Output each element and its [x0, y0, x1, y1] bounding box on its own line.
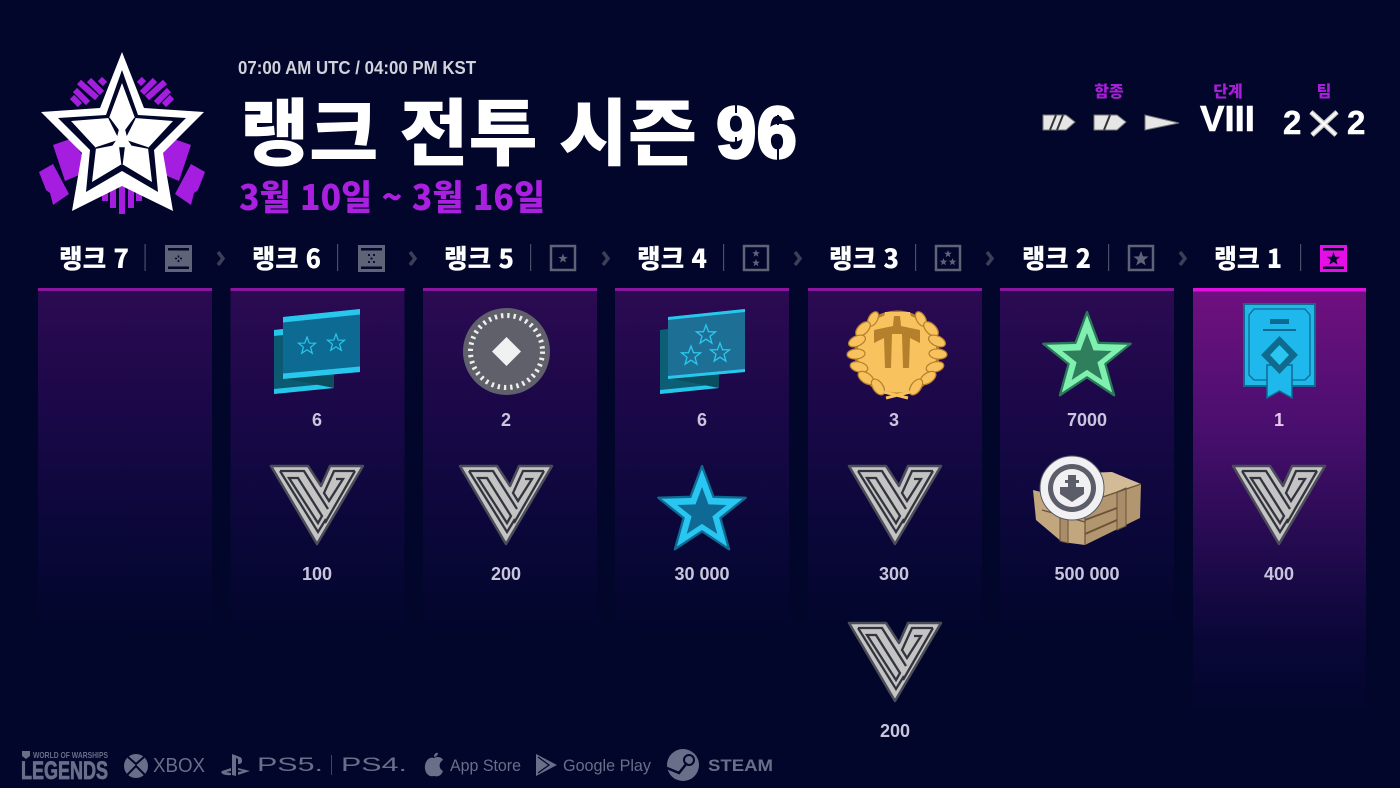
value: 200: 200 [880, 721, 910, 741]
icon: rank 3 badge [936, 246, 960, 270]
logo: PlayStation 5 and 4: PS4. [341, 755, 407, 776]
logo: App Store [425, 753, 521, 776]
panel: rank 7 [38, 239, 212, 640]
team size value: 2 [1347, 104, 1365, 141]
panel: rank 1 [1193, 239, 1366, 724]
logo: Steam: STEAM [708, 756, 773, 775]
reward: V chevron [460, 466, 552, 544]
arrow [410, 252, 415, 265]
value: 2: 2 [501, 410, 511, 430]
logo: PlayStation 5 and 4 [221, 754, 407, 776]
value: 7000: 7000 [1067, 410, 1107, 430]
footer: platform logos [21, 749, 773, 785]
reward: V chevron [849, 466, 941, 544]
reward: V chevron [271, 466, 363, 544]
reward: blue star [658, 466, 746, 549]
heading: rank 2: 랭크 2 [1022, 239, 1091, 276]
icon: rank 1 badge [1320, 245, 1347, 272]
logo: Steam [667, 749, 773, 781]
heading: rank 7: 랭크 7 [59, 239, 129, 276]
logo: Google Play [536, 754, 651, 776]
arrow [603, 252, 608, 265]
logo: World of Warships Legends: LEGENDS [21, 757, 108, 785]
panel: rank 3 [808, 239, 982, 741]
reward: green star [1043, 312, 1131, 395]
panel: rank 4 [615, 239, 789, 640]
title: 랭크 전투 시즌 [240, 75, 697, 181]
arrow [1180, 252, 1185, 265]
icon: rank 6 badge [358, 245, 385, 272]
team size value: 2 [1283, 104, 1301, 141]
value: 300: 300 [879, 564, 909, 584]
logo: Google Play: Google Play [563, 756, 651, 775]
value: 400: 400 [1264, 564, 1294, 584]
value: 1: 1 [1274, 410, 1284, 430]
reward: three-star flag [660, 309, 745, 394]
label: tier: 단계 [1213, 78, 1243, 102]
reward: two-star flag [274, 309, 360, 394]
icon: rank 2 badge [1129, 246, 1153, 270]
logo: PlayStation 5 and 4: PS5. [257, 755, 323, 776]
heading: rank 3: 랭크 3 [829, 239, 899, 276]
arrow [795, 252, 800, 265]
label: team: 팀 [1317, 78, 1331, 102]
heading: rank 6: 랭크 6 [252, 239, 321, 276]
panel: rank 5 [423, 239, 597, 640]
team size value [1283, 104, 1365, 141]
title: 96 [716, 93, 797, 174]
heading: rank 4: 랭크 4 [637, 239, 707, 276]
reward: supply crate with coin [1033, 456, 1141, 545]
logo: Xbox: XBOX [153, 755, 205, 777]
logo: World of Warships Legends [21, 750, 108, 785]
icon: cruiser [1094, 115, 1126, 130]
arrow [218, 252, 223, 265]
tier value: VIII [1200, 98, 1255, 139]
panel: rank 2 [1000, 239, 1174, 640]
value: 200: 200 [491, 564, 521, 584]
heading: rank 1: 랭크 1 [1214, 239, 1282, 276]
value: 3: 3 [889, 410, 899, 430]
value: 6: 6 [312, 410, 322, 430]
value: 6: 6 [697, 410, 707, 430]
time: 07:00 AM UTC / 04:00 PM KST [238, 58, 476, 78]
heading: rank 5: 랭크 5 [444, 239, 514, 276]
value: 500 000: 500 000 [1054, 564, 1120, 584]
icon: rank 5 badge [551, 246, 575, 270]
arrow [987, 252, 992, 265]
value: 100: 100 [302, 564, 332, 584]
icon: destroyer [1043, 115, 1075, 130]
logo: Xbox [124, 754, 205, 778]
reward: V chevron [849, 623, 941, 701]
logo: App Store: App Store [450, 756, 521, 775]
icon: battleship [1145, 115, 1179, 130]
icon: rank 4 badge [744, 246, 768, 270]
battle conditions [1043, 78, 1365, 141]
reward: signal disk [463, 308, 550, 395]
date range: 3월 10일 ~ 3월 16일 [239, 170, 545, 221]
value: 30 000: 30 000 [674, 564, 730, 584]
logo: World of Warships Legends: WORLD OF WARSHIPS [33, 750, 108, 760]
reward: V chevron [1233, 466, 1325, 544]
label: ship types: 함종 [1094, 78, 1124, 102]
panel: rank 6 [230, 239, 404, 640]
logo: rank star emblem [39, 52, 205, 214]
reward: certificate [1244, 304, 1315, 398]
icon: rank 7 badge [165, 245, 192, 272]
reward: gold laurel crest [847, 310, 947, 398]
